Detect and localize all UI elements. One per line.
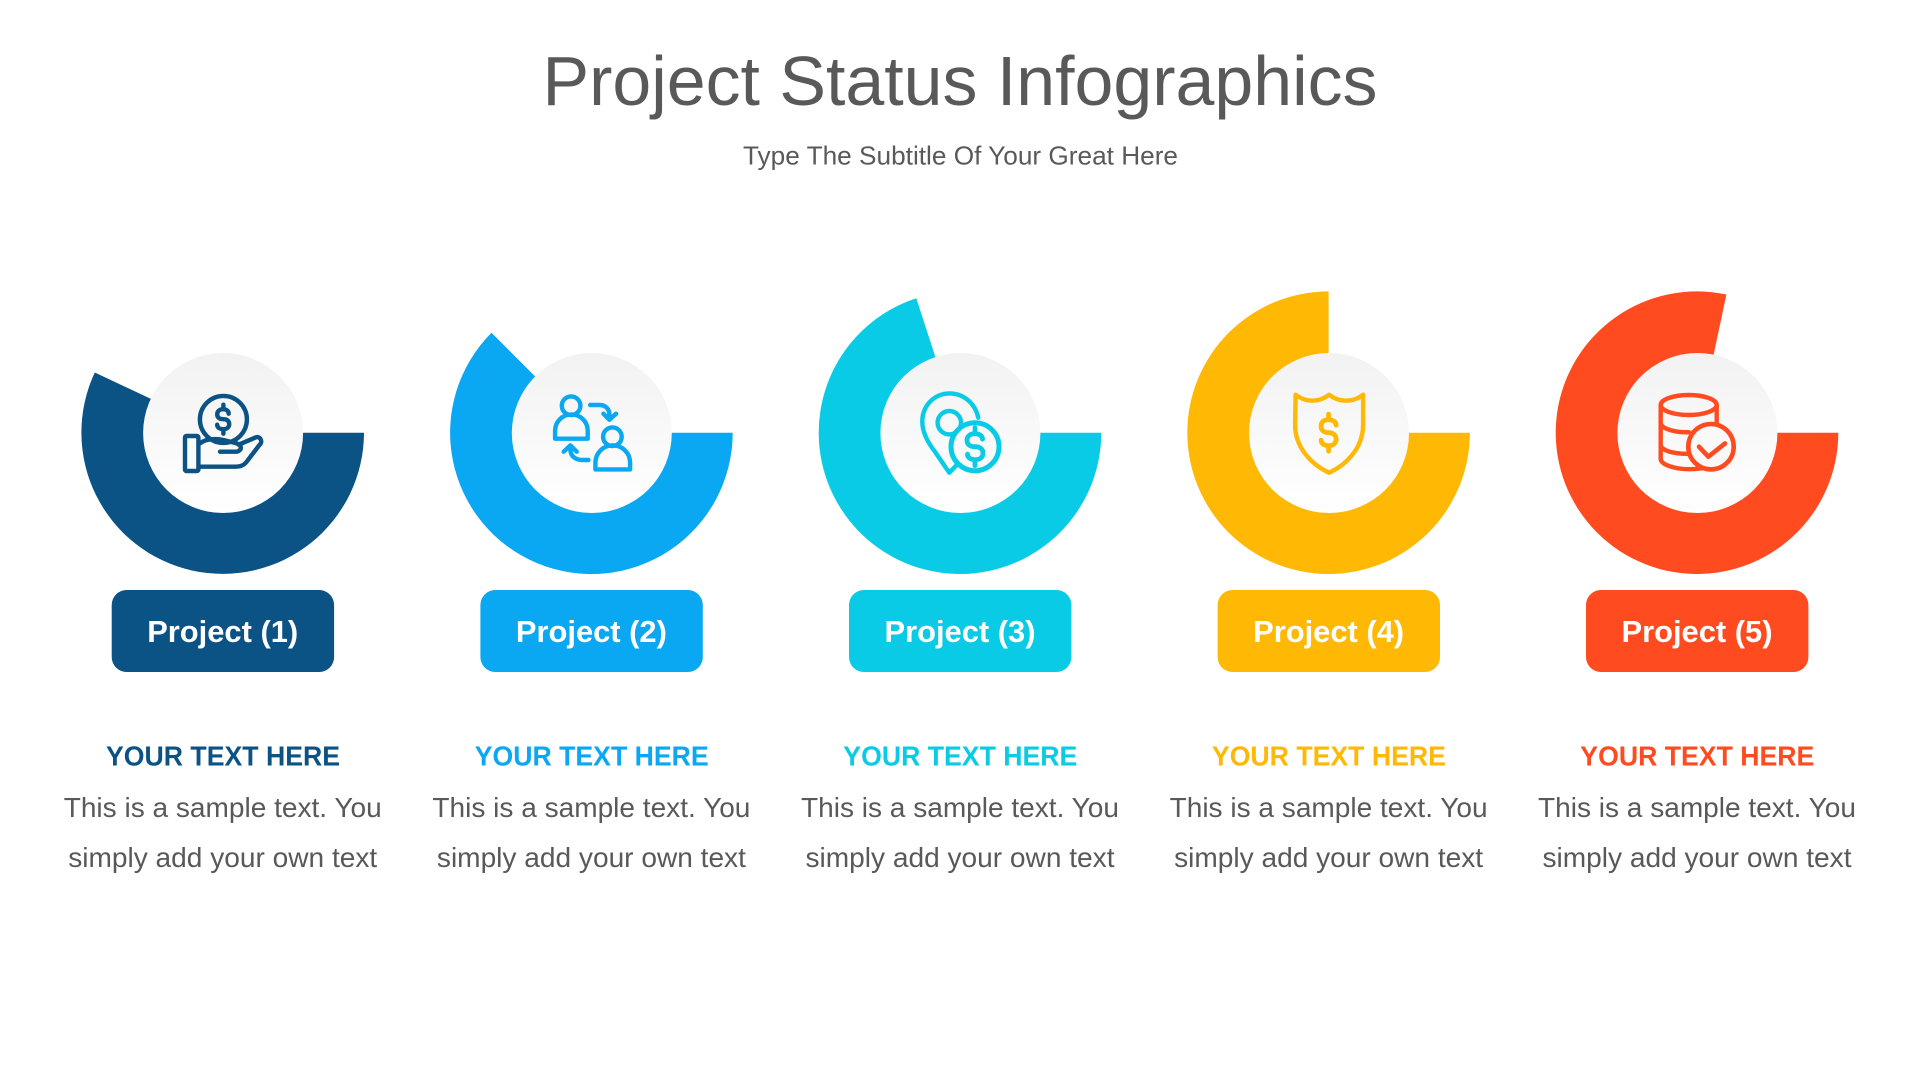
body text: project 2 (432, 792, 750, 873)
progress ring (450, 333, 733, 574)
donut: project 4 progress (1187, 291, 1470, 574)
body text: project 4 (1170, 792, 1488, 873)
button: project 3 (849, 590, 1071, 672)
body text: project 1: This is a sample text. You (64, 792, 382, 823)
panel: project 5 (1538, 291, 1856, 873)
button: project 2: Project (2) (516, 614, 667, 649)
heading: project 5: YOUR TEXT HERE (1580, 740, 1814, 772)
button: project 2 (480, 590, 703, 672)
progress ring (81, 372, 364, 574)
icon: shield with dollar (1295, 395, 1363, 473)
body text: project 2: simply add your own text (437, 842, 746, 873)
button: project 5 (1586, 590, 1808, 672)
donut: project 1 progress (81, 353, 364, 574)
title: Project Status Infographics (542, 42, 1378, 120)
donut: project 3 progress (819, 298, 1101, 574)
inner circle (512, 353, 672, 513)
panel: project 1 (64, 353, 382, 873)
subtitle: Type The Subtitle Of Your Great Here (743, 140, 1178, 170)
button: project 5: Project (5) (1622, 614, 1772, 649)
panel: project 4 (1170, 291, 1488, 873)
body text: project 3 (801, 792, 1119, 873)
progress ring (1187, 291, 1470, 574)
progress ring (819, 298, 1101, 574)
body text: project 3: simply add your own text (806, 842, 1115, 873)
button: project 1: Project (1) (147, 614, 298, 649)
body text: project 3: This is a sample text. You (801, 792, 1119, 823)
inner circle (1249, 353, 1409, 513)
heading: project 2: YOUR TEXT HERE (475, 740, 709, 772)
body text: project 5: simply add your own text (1542, 842, 1852, 873)
body text: project 1: simply add your own text (68, 842, 377, 873)
button: project 3: Project (3) (884, 614, 1036, 649)
icon: location pin with coin (922, 393, 999, 473)
heading: project 4: YOUR TEXT HERE (1212, 740, 1446, 772)
inner circle (1617, 353, 1777, 513)
donut: project 2 progress (450, 333, 733, 574)
body text: project 2: This is a sample text. You (432, 792, 750, 823)
icon: hand holding coin (185, 396, 261, 471)
icon: database with check (1661, 395, 1734, 469)
body text: project 4: This is a sample text. You (1170, 792, 1488, 823)
heading: project 1: YOUR TEXT HERE (106, 740, 340, 772)
body text: project 5: This is a sample text. You (1538, 792, 1856, 823)
heading: project 3: YOUR TEXT HERE (843, 740, 1077, 772)
body text: project 4: simply add your own text (1174, 842, 1483, 873)
inner circle (880, 353, 1040, 513)
panel: project 2 (432, 333, 750, 873)
progress ring (1556, 291, 1838, 574)
icon: people exchange (555, 396, 630, 469)
body text: project 1 (64, 792, 382, 873)
inner circle (143, 353, 303, 513)
donut: project 5 progress (1556, 291, 1838, 574)
panel: project 3 (801, 298, 1119, 873)
body text: project 5 (1538, 792, 1856, 873)
button: project 4 (1218, 590, 1440, 672)
button: project 1 (112, 590, 334, 672)
button: project 4: Project (4) (1253, 614, 1404, 649)
